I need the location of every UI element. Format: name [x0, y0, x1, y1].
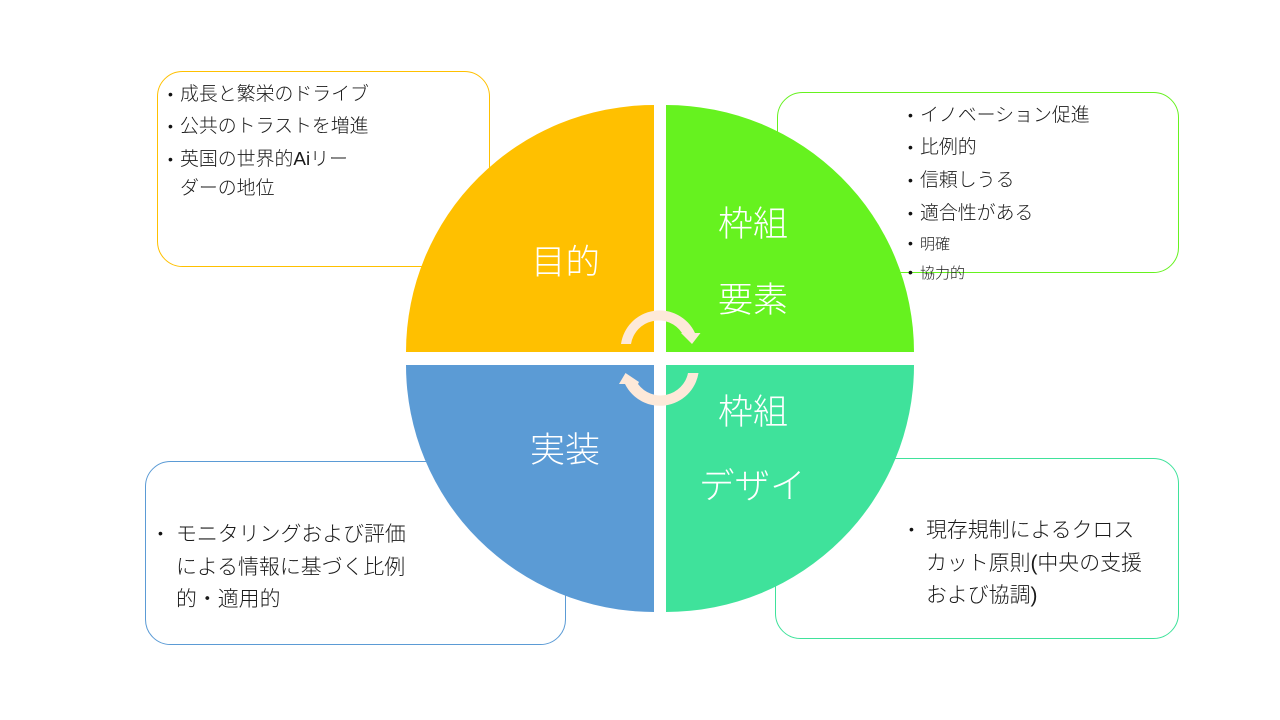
framework design bullets: カット原則(中央の支援 — [926, 552, 1142, 575]
purpose bullets — [168, 83, 369, 199]
implementation bullets: 的・適用的 — [176, 588, 280, 611]
panel: framework design list — [776, 458, 1178, 638]
framework design bullets: および協調) — [926, 584, 1037, 607]
panel: implementation list — [146, 462, 566, 644]
framework element bullets: イノベーション促進 — [920, 104, 1090, 126]
quadrant: framework design — [666, 365, 914, 612]
implementation bullets: モニタリングおよび評価 — [176, 523, 406, 546]
implementation bullets: • — [158, 525, 163, 541]
purpose bullets: ダーの地位 — [180, 177, 275, 199]
framework element bullets: • — [908, 264, 913, 280]
purpose bullets: • — [168, 118, 173, 134]
label: purpose: 目的 — [531, 244, 600, 282]
arrow: bottom clockwise — [619, 373, 698, 406]
purpose bullets: 成長と繁栄のドライブ — [180, 83, 369, 105]
purpose bullets: 英国の世界的Aiリー — [180, 148, 348, 170]
panel: purpose list — [158, 72, 490, 266]
label: framework elements: 枠組 — [718, 205, 788, 244]
framework element bullets: • — [908, 235, 913, 251]
quadrant: purpose — [406, 105, 654, 352]
framework design bullets: 現存規制によるクロス — [926, 519, 1134, 542]
implementation bullets — [158, 523, 406, 611]
framework element bullets: 協力的 — [920, 265, 965, 282]
framework element bullets: 比例的 — [920, 136, 977, 158]
label: framework elements — [718, 205, 788, 320]
purpose bullets: • — [168, 151, 173, 167]
implementation bullets: による情報に基づく比例 — [176, 556, 405, 579]
label: implementation: 実装 — [530, 431, 600, 470]
framework element bullets: • — [908, 107, 913, 123]
framework design bullets — [909, 519, 1142, 607]
arrow: top clockwise — [621, 310, 700, 344]
framework element bullets: • — [908, 172, 913, 188]
framework element bullets: 明確 — [920, 236, 950, 253]
framework element bullets: • — [908, 139, 913, 155]
framework element bullets: 信頼しうる — [920, 169, 1014, 191]
purpose bullets: • — [168, 86, 173, 102]
purpose bullets: 公共のトラストを増進 — [180, 115, 369, 137]
label: framework design — [699, 393, 806, 506]
framework design bullets: • — [909, 521, 914, 537]
framework element bullets: • — [908, 205, 913, 221]
label: framework design: デザイ — [699, 466, 806, 506]
panel: framework elements list — [778, 92, 1178, 282]
quadrant: framework elements — [666, 105, 914, 352]
label: framework elements: 要素 — [718, 281, 788, 320]
framework element bullets — [908, 104, 1090, 282]
label: framework design: 枠組 — [718, 393, 788, 432]
framework element bullets: 適合性がある — [920, 202, 1033, 224]
quadrant: implementation — [406, 365, 654, 612]
